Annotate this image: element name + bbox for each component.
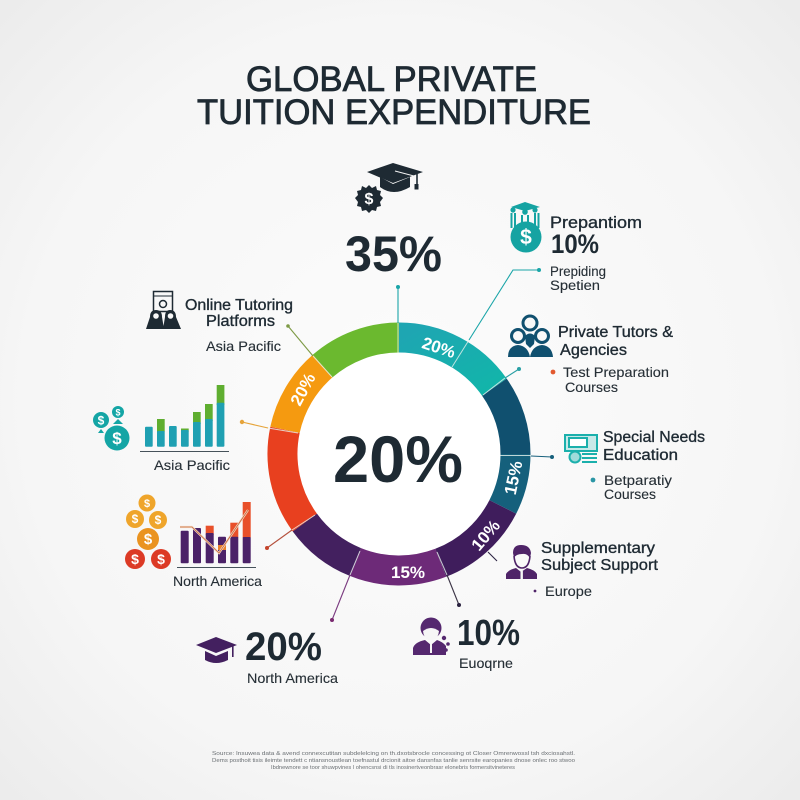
description: Courses — [604, 487, 656, 502]
icon: orange and red coins: $ — [144, 498, 150, 510]
icon: group of people — [508, 316, 553, 357]
title — [197, 60, 591, 132]
center disc — [298, 352, 500, 556]
panel: private tutors and agencies — [508, 316, 674, 395]
icon: orange and red coins: $ — [131, 551, 139, 567]
heading — [603, 429, 705, 464]
chart label: Asia Pacific — [154, 457, 230, 473]
heading: Subject Support — [541, 557, 659, 574]
segment: red — [282, 430, 305, 522]
heading: Prepantiom — [550, 214, 642, 232]
segment: dark purple — [305, 522, 355, 562]
title: TUITION EXPENDITURE — [197, 93, 591, 132]
icon: orange and red coins — [125, 494, 171, 569]
bar and line chart — [177, 502, 256, 568]
segment: green — [323, 338, 399, 366]
icon: person — [506, 545, 537, 579]
icon: orange and red coins: $ — [132, 512, 139, 526]
segment labels — [287, 333, 526, 582]
heading — [185, 297, 293, 330]
heading: Platforms — [206, 313, 275, 330]
segment separators — [268, 323, 531, 575]
value: 10% — [457, 612, 520, 653]
panel: online tutoring platforms — [146, 292, 293, 354]
description — [550, 264, 606, 293]
icon: banknote and gears — [565, 435, 597, 462]
chart label: North America — [173, 573, 262, 589]
icon: teal coins: $ — [115, 408, 121, 418]
heading: Special Needs — [603, 429, 705, 446]
description: Euoqrne — [459, 656, 513, 671]
segment labels: 20% — [287, 370, 320, 409]
icon: graduation cap with dollar gear — [355, 163, 423, 213]
icon: teal coins — [93, 406, 130, 450]
description: Asia Pacific — [206, 338, 281, 354]
icon: orange and red coins: $ — [155, 513, 162, 527]
segment labels: 15% — [501, 459, 526, 496]
donut chart — [268, 323, 531, 582]
value: 35%: 35% — [345, 226, 442, 282]
icon: institution and dollar: $ — [520, 226, 532, 249]
segment: dark purple 10% — [441, 507, 503, 563]
bullet — [551, 370, 555, 374]
segment labels: 15% — [391, 563, 425, 582]
value: 20% — [245, 625, 322, 669]
source note: Dems posthoit tisis ileimte tendett c ntiansnoustlean toefnastul drcionit aitoe dansnfas tanlie senrsite earopanies dnose onlec roo stwoo — [212, 758, 575, 764]
center value: 20% — [333, 422, 463, 496]
icon: person with headset — [413, 618, 450, 655]
panel: supplementary subject support — [506, 540, 659, 599]
source note: Source: Insuwea data & avend connexcutitan subdelelcing on th.dxotsbrocle concessing ot Closer Omrenwossl tsh dxciosahstl. — [212, 751, 575, 757]
icon: orange and red coins: $ — [144, 531, 153, 548]
icon: teal coins: $ — [112, 429, 122, 448]
description — [604, 473, 672, 502]
bullet — [534, 590, 536, 592]
icon: graduation cap with dollar gear: $ — [365, 191, 374, 208]
panel: asia pacific chart — [93, 385, 230, 473]
description: Spetien — [550, 278, 600, 293]
heading: Agencies — [560, 342, 627, 359]
title: GLOBAL PRIVATE — [246, 60, 537, 99]
bar chart — [140, 385, 229, 452]
description: Prepiding — [550, 264, 606, 279]
panel: 20% north america — [196, 625, 338, 686]
heading — [558, 324, 674, 359]
source note — [212, 751, 575, 771]
segment: orange 20% — [285, 366, 323, 430]
description: North America — [247, 670, 338, 686]
icon: orange and red coins: $ — [157, 551, 165, 567]
icon: teal coins: $ — [98, 414, 105, 428]
bullet — [591, 478, 595, 482]
heading: Supplementary — [541, 540, 655, 557]
icon: purple graduation cap — [196, 637, 237, 663]
source note: Ibdnewnore se toor shuwpvines l ohencsnsi di tls inosinertveonbrasr elonebris formersitvineteres — [271, 765, 515, 771]
description — [563, 364, 669, 395]
heading: Online Tutoring — [185, 297, 293, 314]
description: Betparatiy — [604, 473, 672, 488]
panel: north america chart — [125, 494, 262, 589]
segment labels: 10% — [468, 516, 504, 555]
segment: magenta 15% — [355, 562, 441, 570]
heading — [541, 540, 659, 574]
panel: prepantiom — [510, 202, 642, 293]
icon: browser and two tutors — [146, 292, 181, 329]
heading: Education — [603, 447, 678, 464]
segment: teal 20% — [399, 338, 494, 387]
description: Europe — [545, 583, 592, 599]
value: 10% — [551, 229, 599, 259]
panel: special needs education — [565, 429, 705, 502]
panel: 10% europe — [413, 612, 520, 671]
description: Courses — [565, 379, 618, 395]
segment: navy — [494, 387, 516, 454]
segment: blue 15% — [503, 454, 516, 507]
heading: Private Tutors & — [558, 324, 674, 341]
segment labels: 20% — [420, 333, 458, 362]
leader lines — [240, 268, 554, 622]
description: Test Preparation — [563, 364, 669, 380]
